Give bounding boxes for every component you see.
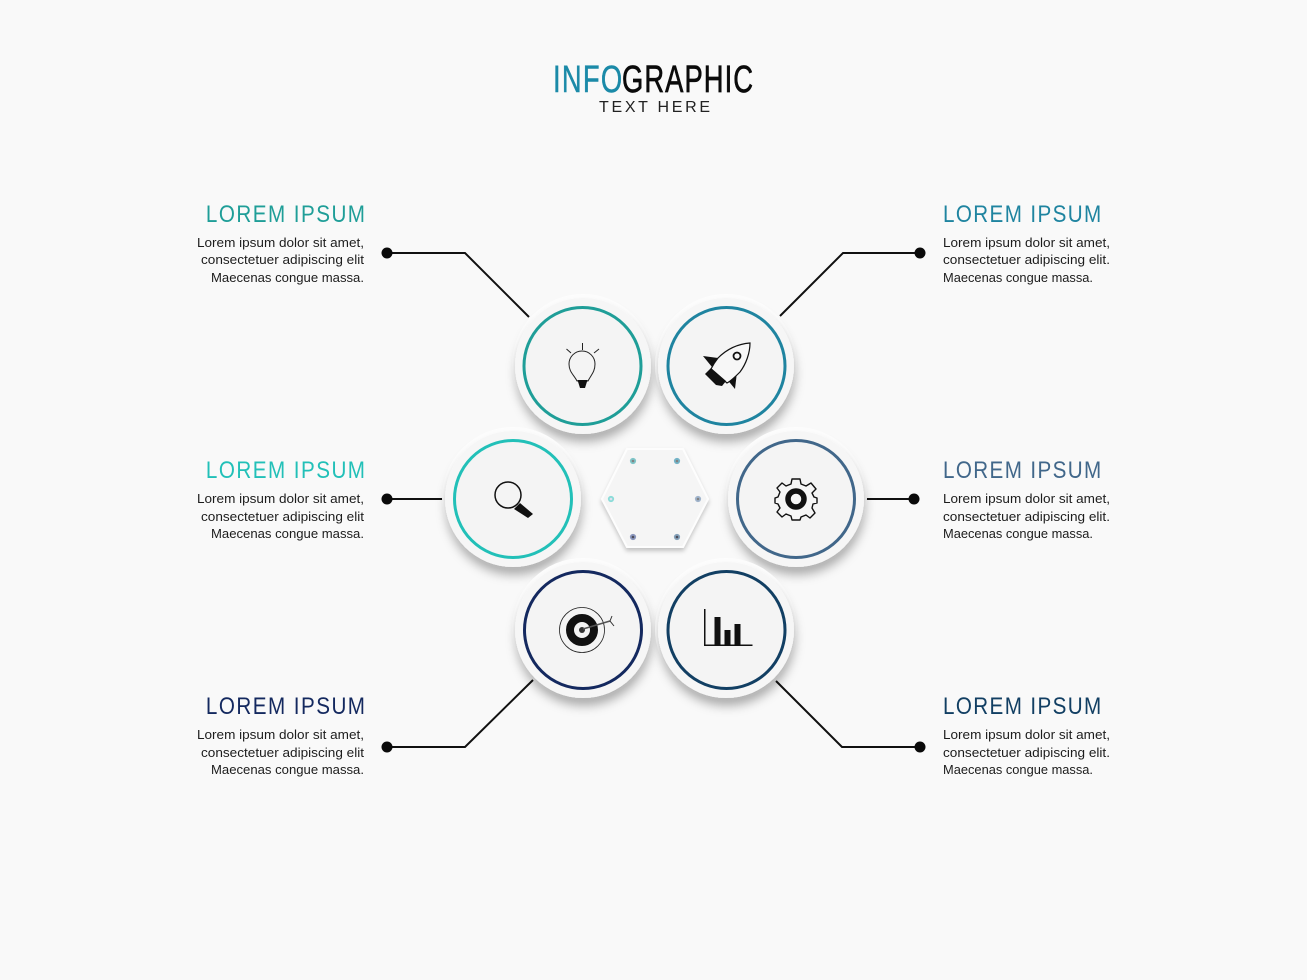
- connector: top left: [387, 253, 529, 317]
- text block: bottom right: LOREM IPSUM: [943, 693, 1101, 719]
- circle: middle left (search): [442, 427, 584, 569]
- text block: top left: [197, 201, 365, 285]
- icon: rocket: [703, 343, 750, 389]
- text block: top right: [943, 201, 1110, 285]
- text block: top left: consectetuer adipiscing elit: [201, 252, 364, 267]
- connector: bottom left: [387, 680, 533, 747]
- text block: middle left: [197, 457, 365, 541]
- text block: bottom left: LOREM IPSUM: [206, 693, 365, 719]
- title: [553, 59, 753, 116]
- title: TEXT HERE: [599, 99, 710, 116]
- text block: bottom right: [943, 693, 1110, 777]
- icon: target: [560, 608, 614, 652]
- text block: bottom left: Maecenas congue massa.: [211, 762, 364, 777]
- text block: middle right: Lorem ipsum dolor sit amet,: [943, 491, 1110, 506]
- text block: middle left: Lorem ipsum dolor sit amet,: [197, 491, 364, 506]
- icon: gear: [775, 479, 817, 520]
- text block: top right: consectetuer adipiscing elit.: [943, 252, 1110, 267]
- text block: bottom left: consectetuer adipiscing elit: [201, 745, 364, 760]
- text block: middle right: consectetuer adipiscing elit.: [943, 509, 1110, 524]
- text block: middle right: LOREM IPSUM: [943, 457, 1101, 483]
- circle: top right (rocket): [655, 294, 797, 436]
- circle: top left (idea): [512, 294, 654, 436]
- circle: bottom right (chart): [655, 558, 797, 700]
- text block: top right: Maecenas congue massa.: [943, 270, 1093, 285]
- connector lines: [387, 253, 920, 747]
- text block: middle left: LOREM IPSUM: [206, 457, 365, 483]
- icon: light bulb: [566, 343, 599, 388]
- text block: bottom right: consectetuer adipiscing elit.: [943, 745, 1110, 760]
- text block: middle left: consectetuer adipiscing elit: [201, 509, 364, 524]
- connector: middle right: [866, 498, 914, 500]
- connector: bottom right: [776, 681, 920, 747]
- icon: bar chart: [704, 609, 752, 646]
- text block: middle right: Maecenas congue massa.: [943, 526, 1093, 541]
- text block: middle right: [943, 457, 1110, 541]
- text block: bottom left: [197, 693, 365, 777]
- center hexagon: [602, 449, 708, 547]
- circle: bottom left (target): [512, 558, 654, 700]
- text block: top left: Lorem ipsum dolor sit amet,: [197, 235, 364, 250]
- text block: bottom right: Lorem ipsum dolor sit amet,: [943, 727, 1110, 742]
- text block: top left: LOREM IPSUM: [206, 201, 365, 227]
- title: INFO: [553, 59, 622, 101]
- hexagon dots: [609, 459, 700, 539]
- text block: bottom left: Lorem ipsum dolor sit amet,: [197, 727, 364, 742]
- circle: middle right (gear): [725, 427, 867, 569]
- text block: top right: LOREM IPSUM: [943, 201, 1101, 227]
- text block: top right: Lorem ipsum dolor sit amet,: [943, 235, 1110, 250]
- connector: middle left: [387, 498, 443, 500]
- icon: magnifier: [495, 482, 533, 518]
- title: GRAPHIC: [622, 59, 753, 101]
- text block: middle left: Maecenas congue massa.: [211, 526, 364, 541]
- text block: top left: Maecenas congue massa.: [211, 270, 364, 285]
- connector: top right: [780, 253, 920, 316]
- connector dots: [382, 248, 926, 752]
- text block: bottom right: Maecenas congue massa.: [943, 762, 1093, 777]
